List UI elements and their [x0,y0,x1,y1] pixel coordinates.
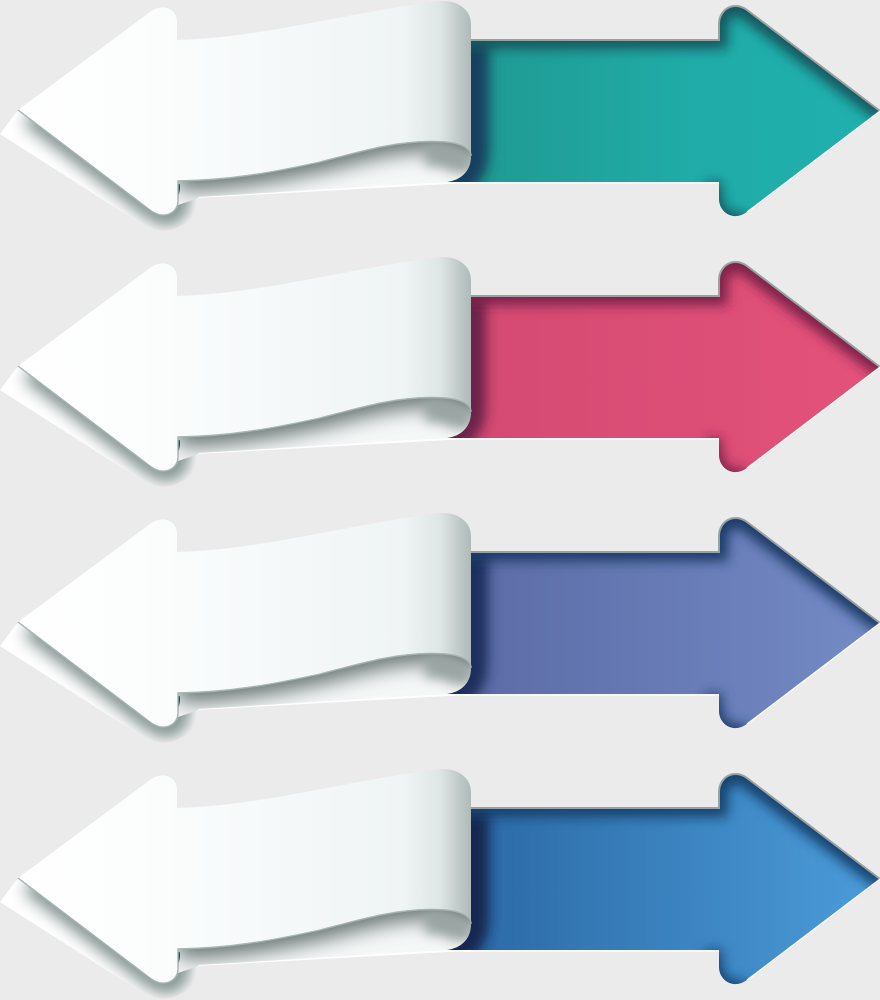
row 2: pink arrow pair [0,257,880,487]
cut-out arrow: pink, pointing right [420,260,880,477]
row 4: blue arrow pair [0,769,880,999]
row 3: periwinkle arrow pair [0,513,880,743]
cut-out arrow: blue, pointing right [420,772,880,989]
paper arrow: curled white, pointing left [0,769,478,999]
row 1: teal arrow pair [0,1,880,231]
paper arrow: curled white, pointing left [0,1,478,231]
paper arrow: curled white, pointing left [0,513,478,743]
cut-out arrow: teal, pointing right [420,4,880,221]
cut-out arrow: periwinkle, pointing right [420,516,880,733]
paper arrow: curled white, pointing left [0,257,478,487]
